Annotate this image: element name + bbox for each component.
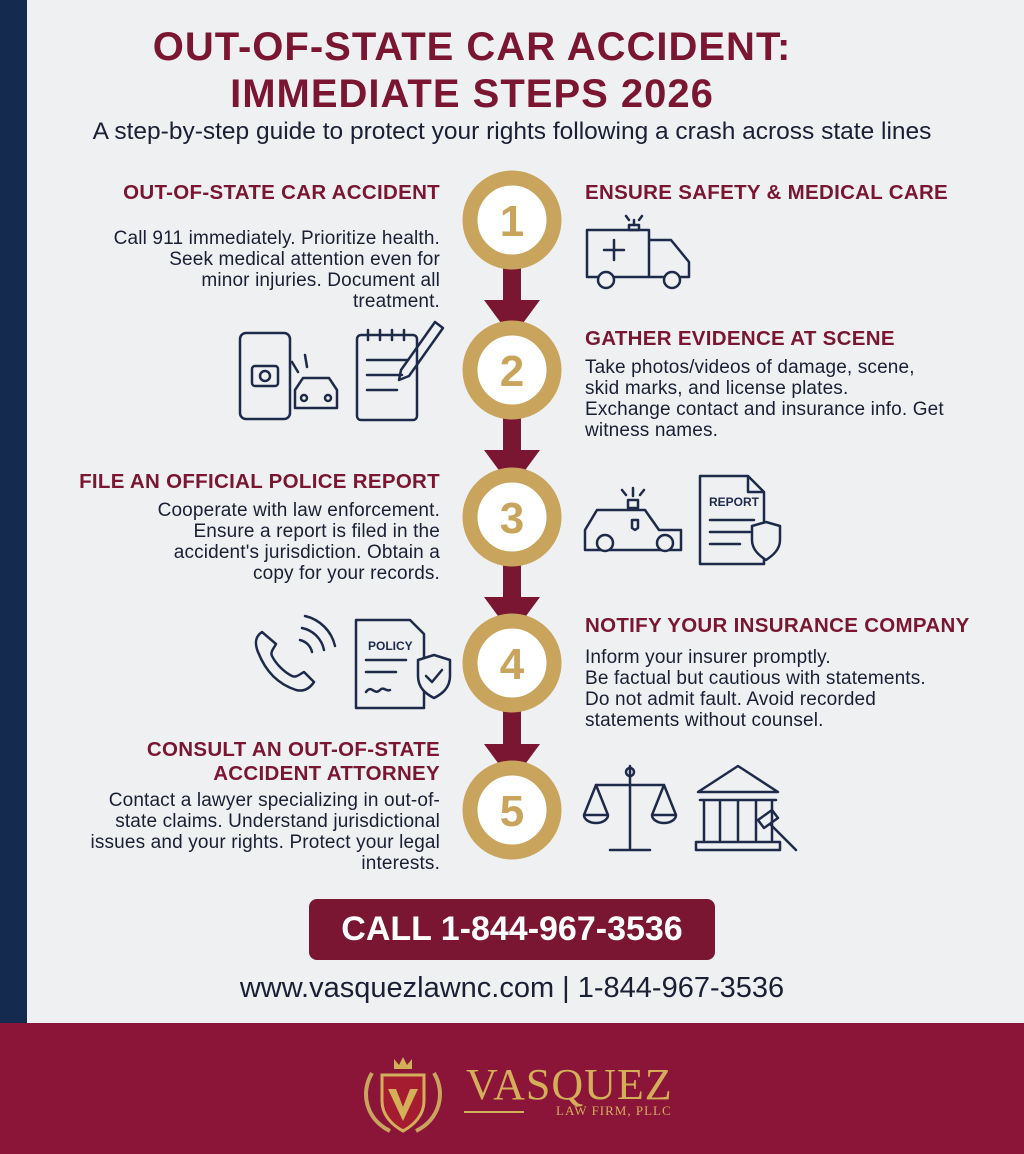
step 2 right: Exchange contact and insurance info. Get [585,399,944,420]
logo: LAW FIRM, PLLC [556,1103,672,1118]
step 5 left [90,738,440,874]
left navy stripe [0,0,27,1023]
step 3 left: FILE AN OFFICIAL POLICE REPORT [79,470,440,493]
step 5 left: Contact a lawyer specializing in out-of- [109,790,440,811]
arrow 1-2 [484,265,540,338]
icons [240,216,796,850]
step 1 left: Call 911 immediately. Prioritize health. [114,228,440,249]
step 1 right: ENSURE SAFETY & MEDICAL CARE [585,181,948,204]
step 2 right: Take photos/videos of damage, scene, [585,357,915,378]
step 4 right: Be factual but cautious with statements. [585,668,926,689]
step 1 left: Seek medical attention even for [169,249,440,270]
step 4 right: statements without counsel. [585,710,824,731]
step 1 left [114,181,440,312]
logo [364,1057,673,1133]
step timeline: 5 [500,787,524,836]
footer [0,1023,1024,1154]
step 1 left: minor injuries. Document all [201,270,440,291]
step 3 left: accident's jurisdiction. Obtain a [174,542,440,563]
step 2 right: skid marks, and license plates. [585,378,848,399]
title [153,25,791,116]
step 3 left: copy for your records. [253,563,440,584]
title: IMMEDIATE STEPS 2026 [230,72,714,116]
subtitle: A step-by-step guide to protect your rights following a crash across state lines [93,118,931,145]
step timeline: 3 [500,494,524,543]
step 4 right: Do not admit fault. Avoid recorded [585,689,876,710]
step 5 left: state claims. Understand jurisdictional [115,811,440,832]
step 2 right [585,327,944,441]
step 4 right: NOTIFY YOUR INSURANCE COMPANY [585,614,970,637]
step timeline: POLICY [368,639,413,653]
step 4 right: Inform your insurer promptly. [585,647,831,668]
step 5 left: ACCIDENT ATTORNEY [213,762,440,785]
step 2 right: witness names. [585,420,718,441]
step 4 right [585,614,970,731]
step 3 left: Cooperate with law enforcement. [158,500,440,521]
step 5 left: issues and your rights. Protect your legal [90,832,440,853]
CTA button [309,899,715,960]
title: OUT-OF-STATE CAR ACCIDENT: [153,25,791,69]
step timeline: REPORT [709,495,760,509]
step 3 left [79,470,440,584]
step timeline: 1 [500,197,524,246]
logo: VASQUEZ [466,1060,673,1109]
website line: www.vasquezlawnc.com | 1-844-967-3536 [240,972,784,1004]
step 2 right: GATHER EVIDENCE AT SCENE [585,327,895,350]
step 1 left: OUT-OF-STATE CAR ACCIDENT [123,181,440,204]
step timeline: 4 [500,640,525,689]
step 5 left: interests. [361,853,440,874]
step 1 left: treatment. [353,291,440,312]
CTA button: CALL 1-844-967-3536 [341,910,683,948]
step 5 left: CONSULT AN OUT-OF-STATE [147,738,440,761]
step timeline: 2 [500,347,524,396]
step 3 left: Ensure a report is filed in the [193,521,440,542]
